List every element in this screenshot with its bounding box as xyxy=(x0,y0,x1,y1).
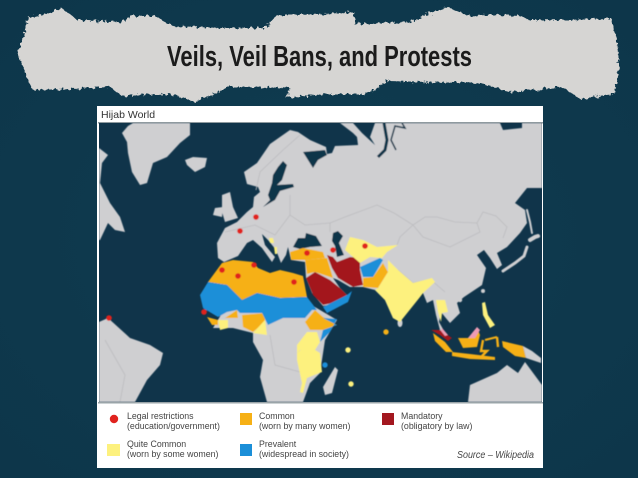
brush stroke background xyxy=(18,7,619,102)
land: Greenland xyxy=(122,123,190,185)
regions: prevalent (blue) xyxy=(200,258,383,342)
borders xyxy=(105,135,507,402)
land: Eurasia xyxy=(217,123,542,338)
legend: legal restrictions: (education/government) xyxy=(127,421,220,431)
legend: quite common: Quite Common xyxy=(127,439,186,449)
land: Australia xyxy=(468,362,542,402)
map panel xyxy=(97,106,543,468)
source note: Source – Wikipedia xyxy=(457,450,534,461)
panel frame xyxy=(97,106,543,468)
legend: legal restrictions xyxy=(110,411,220,431)
legend: prevalent: (widespread in society) xyxy=(259,449,349,459)
legend: quite common xyxy=(107,439,218,459)
land: Africa xyxy=(213,300,337,402)
legend: common xyxy=(240,411,350,431)
land: Japan and Sakhalin xyxy=(503,210,538,271)
regions: mandatory (red) xyxy=(306,255,452,341)
panel heading: Hijab World xyxy=(101,109,155,121)
legend: legal restrictions: Legal restrictions xyxy=(127,411,194,421)
seas: Baltic, White, Black, Caspian, Ob xyxy=(263,123,405,257)
land: North America xyxy=(99,148,125,240)
land: Britain and Ireland xyxy=(213,192,238,222)
land: South America xyxy=(99,318,163,402)
grey Papua xyxy=(523,346,541,363)
island dots xyxy=(322,329,389,387)
legend: quite common: (worn by some women) xyxy=(127,449,218,459)
legend: common: (worn by many women) xyxy=(259,421,350,431)
legend: mandatory xyxy=(382,411,472,431)
land: islands xyxy=(398,289,485,327)
legend: prevalent: Prevalent xyxy=(259,439,297,449)
legend: mandatory: Mandatory xyxy=(401,411,443,421)
legal restriction dots xyxy=(106,214,368,321)
regions: quite common (yellow) xyxy=(218,237,495,393)
title text: Veils, Veil Bans, and Protests xyxy=(167,41,472,73)
title banner xyxy=(18,7,619,102)
legend xyxy=(98,402,543,461)
regions: mixed (pink) xyxy=(441,327,480,338)
legend: mandatory: (obligatory by law) xyxy=(401,421,472,431)
land: Madagascar xyxy=(323,367,338,395)
legend: prevalent xyxy=(240,439,349,459)
land: Iceland xyxy=(185,157,207,172)
legend: common: Common xyxy=(259,411,295,421)
regions: common (orange) xyxy=(207,248,526,360)
world map xyxy=(99,123,542,402)
